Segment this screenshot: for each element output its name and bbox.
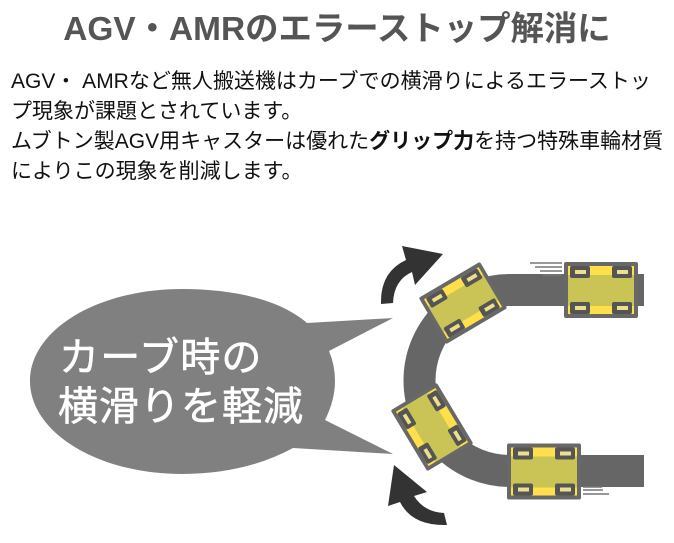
bubble text: カーブ時の [59, 336, 263, 380]
title: AGV・AMRのエラーストップ解消に [63, 11, 611, 48]
vehicle: top straight [564, 262, 638, 318]
vehicle: bottom straight [507, 444, 581, 500]
body text: ムブトン製AGV用キャスターは優れたグリップ力を持つ特殊車輪材質 [11, 130, 663, 153]
vehicle: upper curve [419, 262, 507, 344]
body text [11, 70, 663, 183]
arrow: bottom [388, 465, 447, 525]
body text: AGV・ AMRなど無人搬送機はカーブでの横滑りによるエラーストッ [11, 70, 651, 93]
arrow: top [381, 246, 443, 304]
body text: によりこの現象を削減します。 [11, 160, 302, 183]
vehicle: lower curve [391, 383, 473, 471]
motion lines: top [530, 263, 562, 275]
motion lines: bottom [583, 487, 609, 494]
road [420, 290, 644, 471]
speech bubble [30, 289, 393, 474]
body text: プ現象が課題とされています。 [11, 100, 302, 123]
bubble text: 横滑りを軽減 [58, 385, 304, 429]
